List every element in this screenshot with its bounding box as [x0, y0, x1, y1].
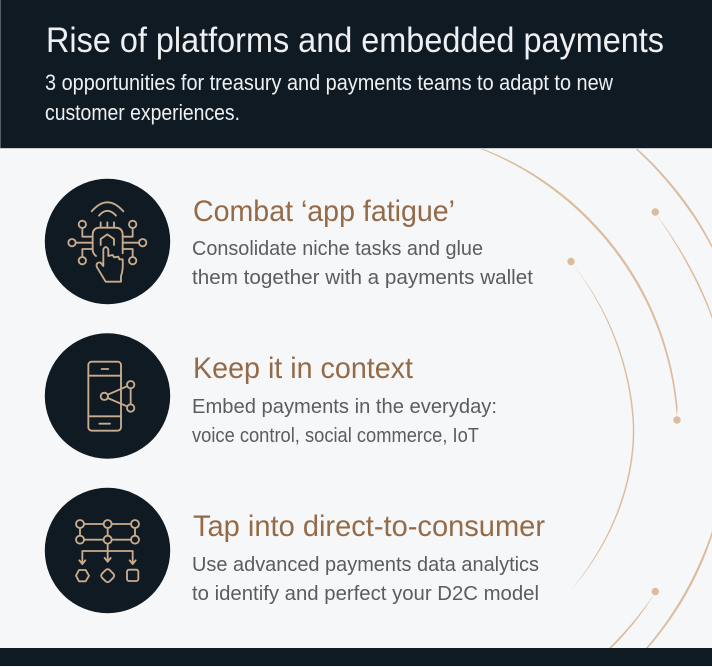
text: combat app fatigue description: them together with a payments wallet: [192, 266, 533, 289]
subtitle: 3 opportunities for treasury and payments teams to adapt to new: [45, 70, 613, 95]
icon: flow network: [45, 488, 170, 613]
icon: phone with share nodes: [45, 333, 170, 459]
text: tap into direct-to-consumer description: to identify and perfect your D2C model: [192, 582, 539, 605]
header band: [0, 0, 712, 149]
heading: keep it in context: Keep it in context: [193, 352, 414, 385]
text: keep it in context description: Embed payments in the everyday:: [192, 395, 497, 418]
title: Rise of platforms and embedded payments: [46, 21, 664, 60]
text: tap into direct-to-consumer description: Use advanced payments data analytics: [192, 553, 539, 576]
heading: combat app fatigue: Combat ‘app fatigue’: [193, 195, 455, 228]
decorative arcs and dots: [480, 148, 712, 648]
text: keep it in context description: voice control, social commerce, IoT: [192, 424, 479, 447]
icon: fingerprint touch on connected chip: [45, 179, 170, 304]
text: combat app fatigue description: Consolidate niche tasks and glue: [192, 237, 483, 260]
heading: tap into direct-to-consumer: Tap into direct-to-consumer: [193, 510, 545, 543]
subtitle: customer experiences.: [45, 100, 240, 125]
footer band: [0, 648, 712, 666]
